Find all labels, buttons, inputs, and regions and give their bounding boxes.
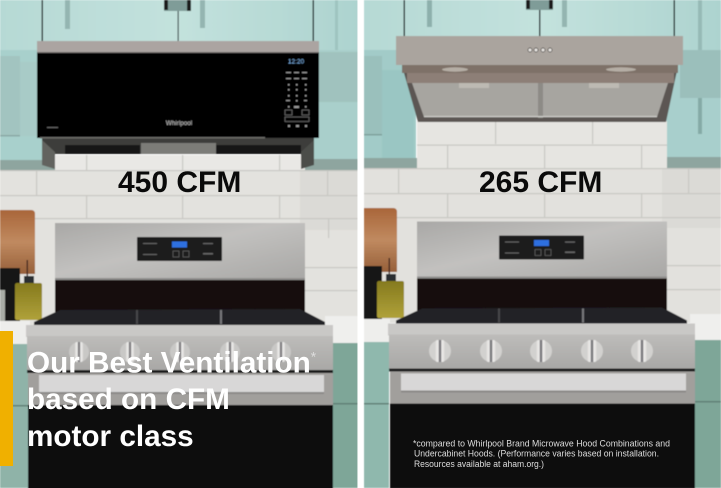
right range: [388, 222, 695, 488]
left photo panel: [0, 0, 358, 488]
hood control buttons: [528, 48, 552, 52]
microwave clock: 12:20: [288, 58, 305, 66]
footnote: *compared to Whirlpool Brand Microwave Hood Combinations and: [413, 438, 670, 448]
footnote: Undercabinet Hoods. (Performance varies based on installation.: [414, 449, 659, 459]
headline: [27, 346, 317, 453]
label: 450 CFM: 450 CFM: [118, 166, 241, 199]
range knobs: [429, 340, 653, 362]
right side cabinet: [665, 50, 721, 168]
left side cabinet: [0, 50, 55, 171]
undercabinet hood: [396, 36, 683, 122]
headline: *: [311, 348, 317, 364]
range knobs: [69, 342, 291, 362]
cutting board: [364, 208, 397, 272]
oil bottle and utensil pot: [0, 260, 42, 321]
headline: Our Best Ventilation: [27, 346, 311, 380]
headline: based on CFM: [27, 383, 230, 416]
left side cabinet: [364, 50, 417, 169]
whirlpool logo: Whirlpool: [166, 120, 192, 127]
footnote: Resources available at aham.org.): [414, 459, 544, 469]
footnote: [413, 438, 670, 469]
hood lights: [442, 67, 636, 72]
label: 265 CFM: 265 CFM: [479, 166, 602, 199]
right side cabinet: [302, 50, 358, 170]
headline: motor class: [27, 420, 194, 453]
oil bottle and utensil pot: [364, 258, 404, 319]
microwave hood: [37, 41, 319, 169]
left range: [26, 223, 333, 488]
upper cabinets: [364, 0, 721, 134]
yellow accent bar: [0, 331, 13, 466]
backsplash tiles: [364, 121, 721, 323]
upper cabinets: [0, 0, 358, 56]
backsplash tiles: [0, 155, 358, 325]
right photo panel: [364, 0, 721, 488]
cutting board: [0, 210, 35, 274]
microwave keypad: [47, 72, 309, 128]
countertop and lower cabinets: [364, 314, 721, 488]
countertop and lower cabinets: [0, 316, 358, 488]
panel divider: [358, 0, 364, 488]
